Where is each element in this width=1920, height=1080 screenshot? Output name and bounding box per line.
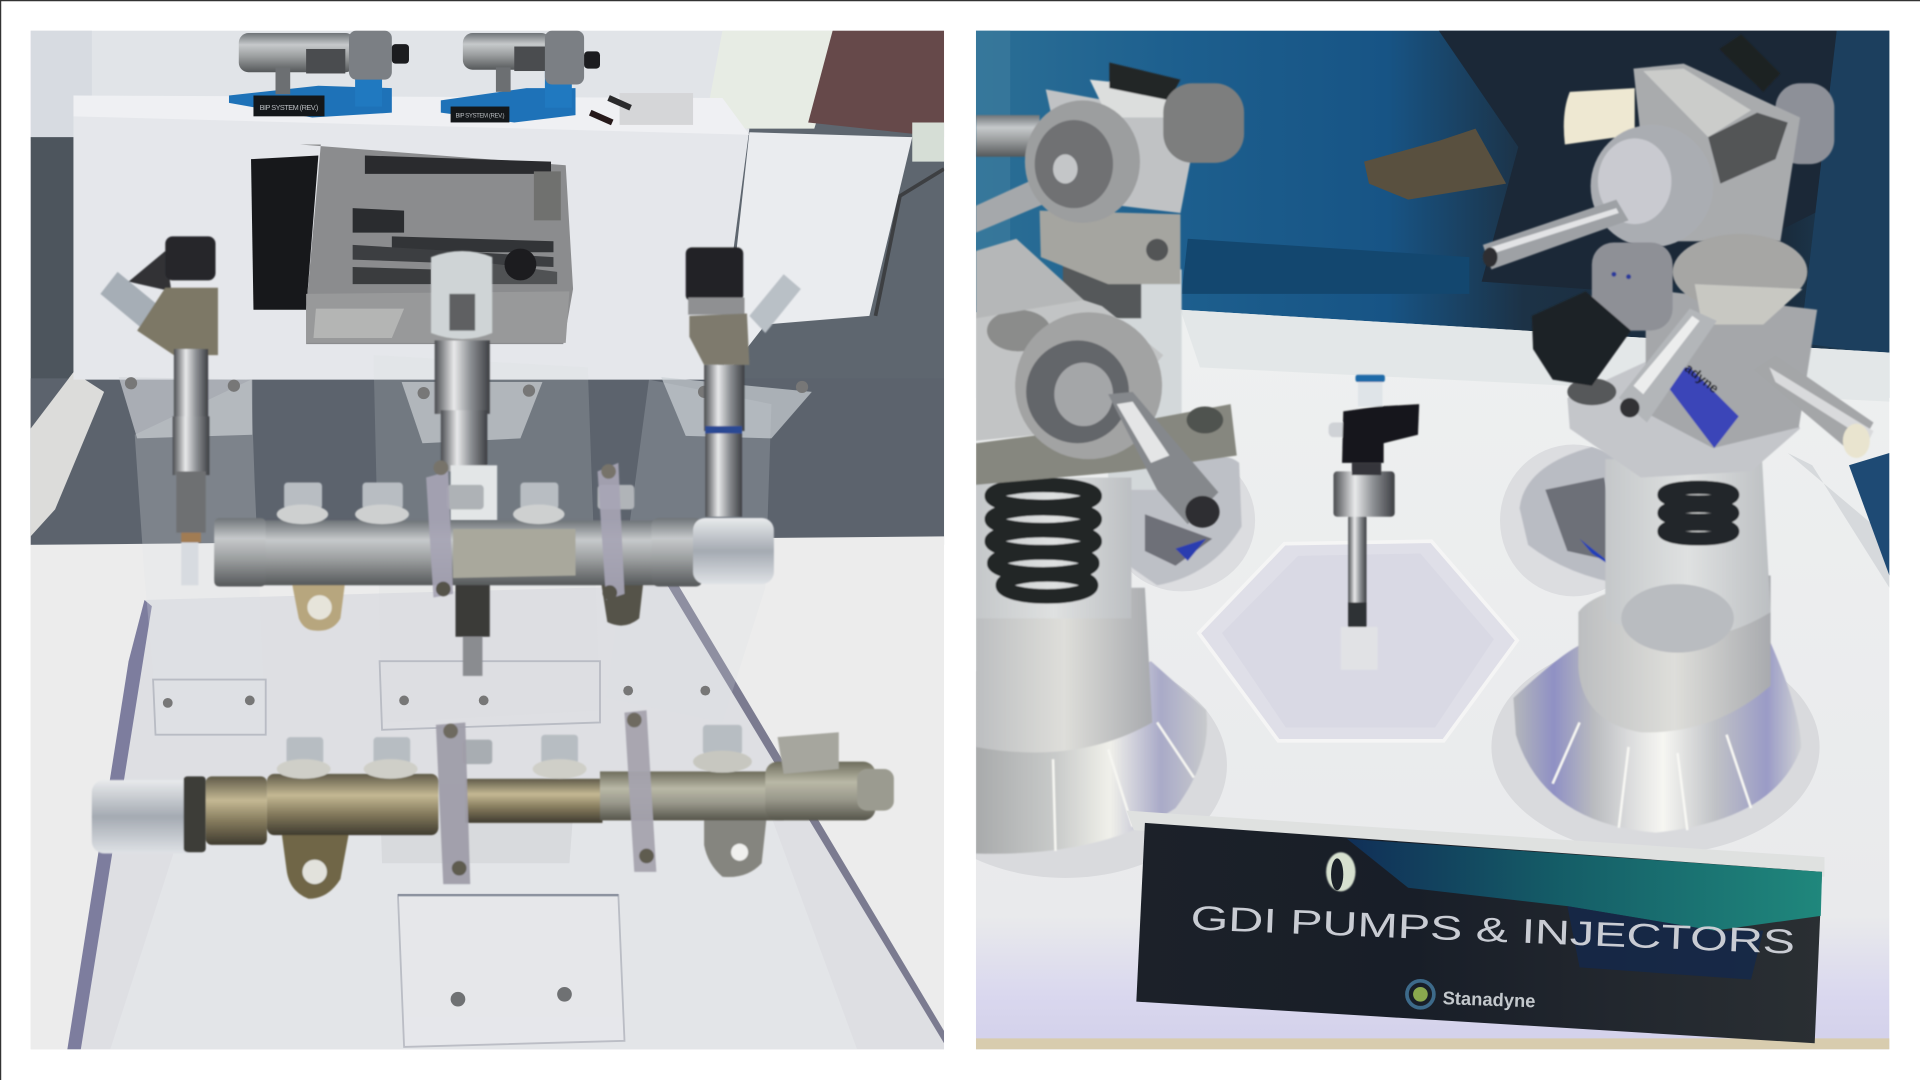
- fuel pumps on blue stands: BIP SYSTEM (REV.): [260, 103, 318, 112]
- rail mounting lug: [291, 580, 345, 631]
- back right pump: [1519, 446, 1614, 581]
- pump cone base: [1513, 642, 1801, 833]
- fuel pumps on blue stands: [229, 31, 693, 125]
- Stanadyne logo: [1407, 981, 1536, 1011]
- hexagonal acrylic base: [1199, 541, 1517, 741]
- Stanadyne logo: Stanadyne: [1442, 987, 1536, 1011]
- center injector: [431, 251, 497, 676]
- product sign: [1127, 811, 1824, 1043]
- upper fuel rail: [214, 460, 774, 631]
- fuel pumps on blue stands: BIP SYSTEM (REV.): [456, 113, 504, 120]
- pump spring: [992, 485, 1095, 596]
- acrylic base plate: [67, 585, 944, 1049]
- pump cone base: [976, 661, 1207, 854]
- lower fuel rail: [92, 710, 894, 899]
- blue display background: [976, 31, 1889, 398]
- pump spring: [1664, 487, 1733, 539]
- rail mounting lugs: [282, 833, 349, 899]
- acrylic stands: [119, 355, 812, 1047]
- white display block: [73, 96, 912, 380]
- panel: GDI pumps and injectors photo: [904, 31, 1889, 1049]
- front right pump: [1513, 234, 1873, 833]
- sign teal graphic: [1347, 839, 1822, 931]
- left injector: [100, 236, 218, 585]
- rail body: [267, 774, 438, 835]
- GDI injector: [1329, 375, 1419, 670]
- upper right pump: [1483, 34, 1834, 269]
- front right pump: adyne: [1682, 360, 1722, 396]
- panel: common rail photo: [31, 31, 944, 1049]
- right injector: [686, 247, 801, 517]
- rail body: [214, 520, 698, 585]
- background wall and floor: [31, 31, 944, 1049]
- white table top: [904, 310, 1889, 1049]
- back left pump: [976, 62, 1244, 585]
- sign title: GDI PUMPS & INJECTORS: [1190, 899, 1796, 962]
- sofa and visitor in background: [740, 30, 944, 316]
- front left pump: [976, 239, 1237, 854]
- control unit casing: [251, 144, 573, 344]
